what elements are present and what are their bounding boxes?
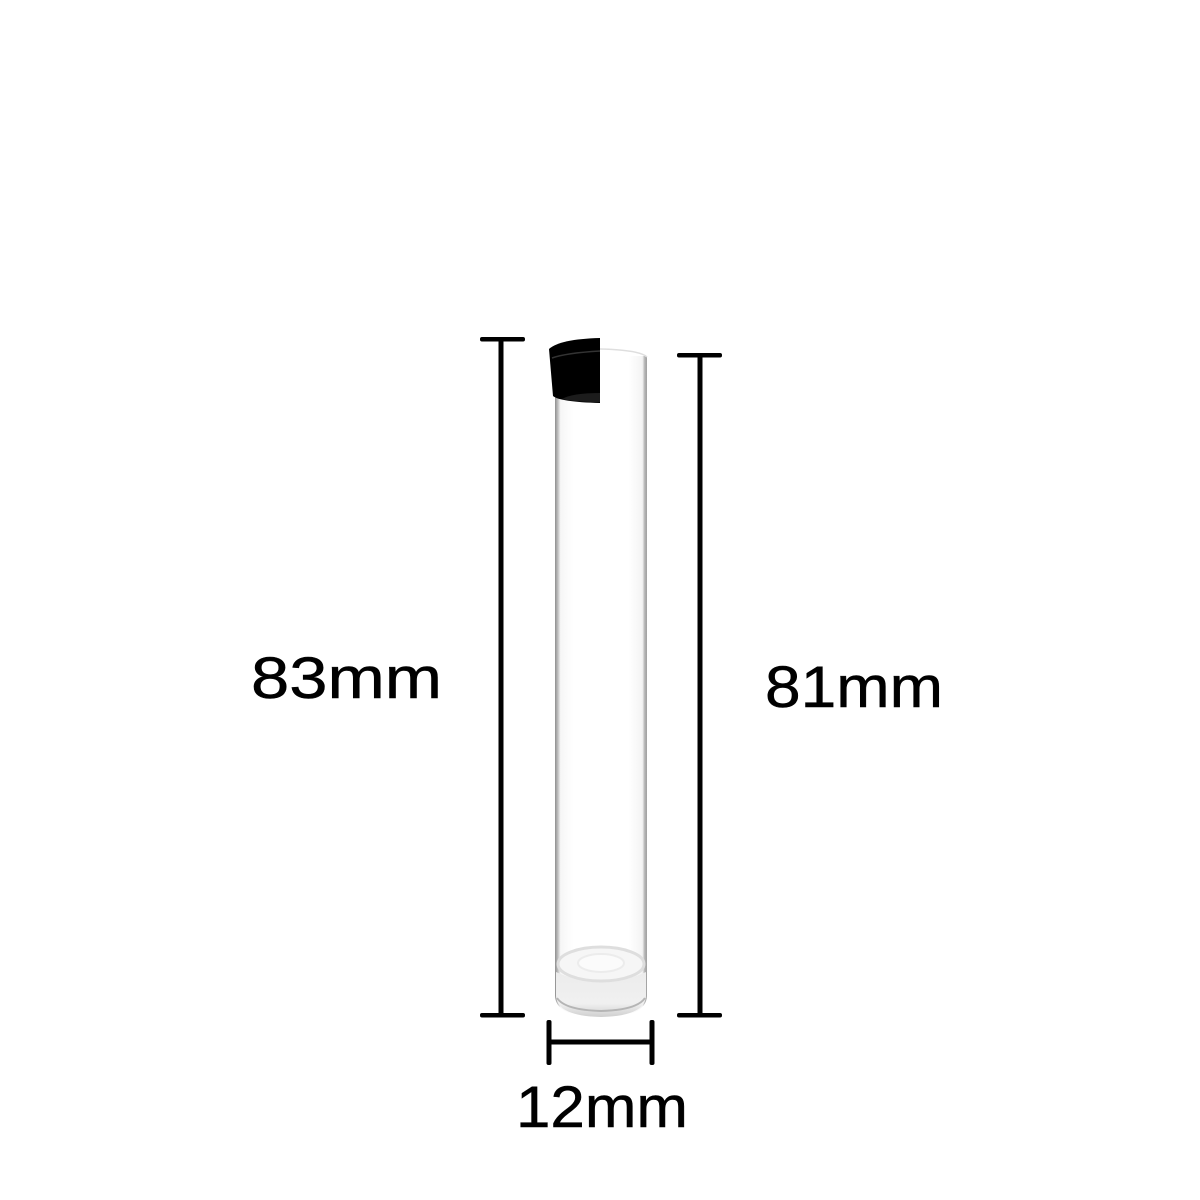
tube base: [556, 947, 646, 1017]
label: 12mm: 12mm: [516, 1075, 688, 1140]
dimension: 12mm width bar: [546, 1020, 654, 1065]
dimension: 83mm height bar: [480, 337, 525, 1018]
product: clear tube with black cap: [549, 338, 647, 1018]
label: 81mm: 81mm: [765, 655, 943, 720]
tube rim: [600, 349, 647, 357]
label: 83mm: 83mm: [251, 646, 442, 711]
tube body: [555, 356, 647, 1018]
dimension: 81mm height bar: [677, 353, 722, 1018]
black cap: [549, 338, 600, 403]
